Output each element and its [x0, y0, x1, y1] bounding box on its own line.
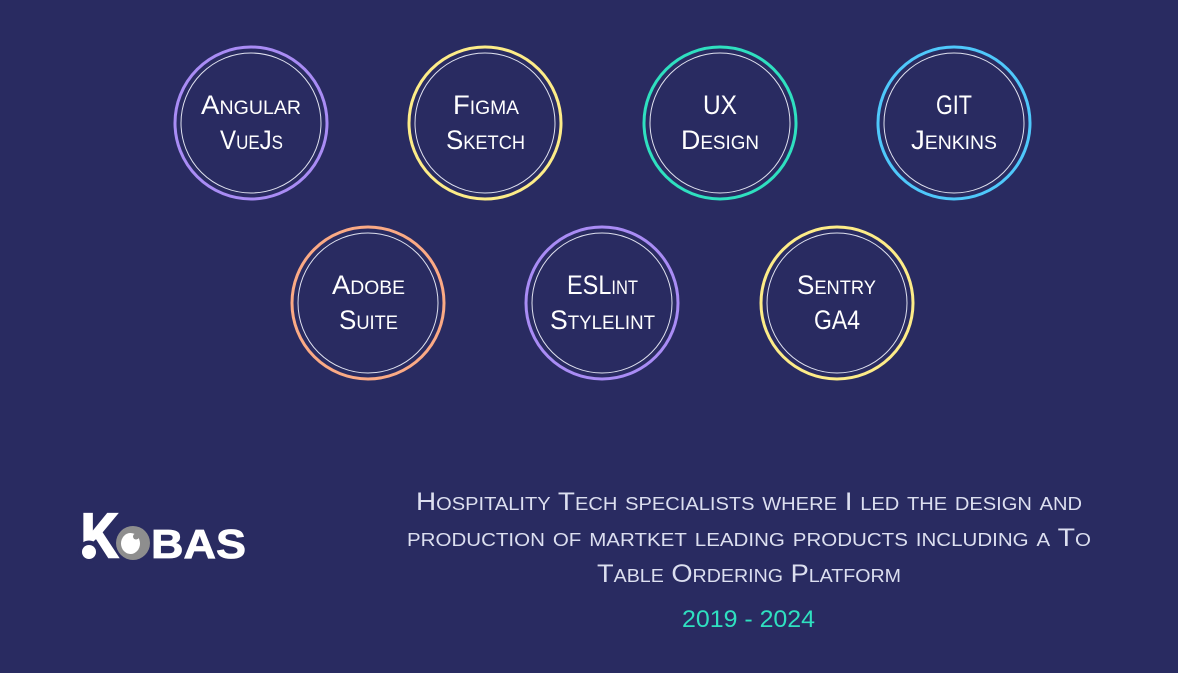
skill badge: GIT Jenkins: GIT	[936, 90, 972, 120]
logo: Kobas	[78, 502, 246, 571]
skill badge: Figma Sketch: Figma	[453, 90, 519, 120]
skill badge: GIT Jenkins: Jenkins	[911, 125, 997, 155]
skill badge: Adobe Suite: Adobe	[332, 270, 405, 300]
skill badge: Figma Sketch: Sketch	[446, 125, 525, 155]
company description: production of martket leading products including a To	[407, 524, 1091, 552]
skill badge: UX Design: Design	[681, 125, 759, 155]
skill badge: GIT Jenkins	[878, 47, 1030, 199]
skill badge: UX Design	[644, 47, 796, 199]
skill badge: Sentry GA4: Sentry	[797, 270, 876, 300]
logo: Kobas: BAS	[151, 521, 246, 567]
company description: Table Ordering Platform	[597, 560, 901, 588]
skill badge: Sentry GA4: GA4	[814, 305, 860, 335]
skill badge: Angular VueJs: Angular	[201, 90, 301, 120]
logo: Kobas: K	[81, 502, 118, 571]
company description: Hospitality Tech specialists where I led the design and	[416, 488, 1082, 516]
employment dates: 2019 - 2024	[682, 606, 815, 633]
skill badge: Sentry GA4	[761, 227, 913, 379]
skill badge: Angular VueJs: VueJs	[220, 125, 283, 155]
skill badge: ESLint Stylelint: ESLint	[567, 270, 638, 300]
skill badge: Angular VueJs	[175, 47, 327, 199]
skill badge: Adobe Suite	[292, 227, 444, 379]
skill badge: UX Design: UX	[703, 90, 737, 120]
skill badge: Adobe Suite: Suite	[339, 305, 398, 335]
skill badge: ESLint Stylelint: Stylelint	[550, 305, 655, 335]
company description	[407, 488, 1091, 588]
skill badge: ESLint Stylelint	[526, 227, 678, 379]
skill badge: Figma Sketch	[409, 47, 561, 199]
